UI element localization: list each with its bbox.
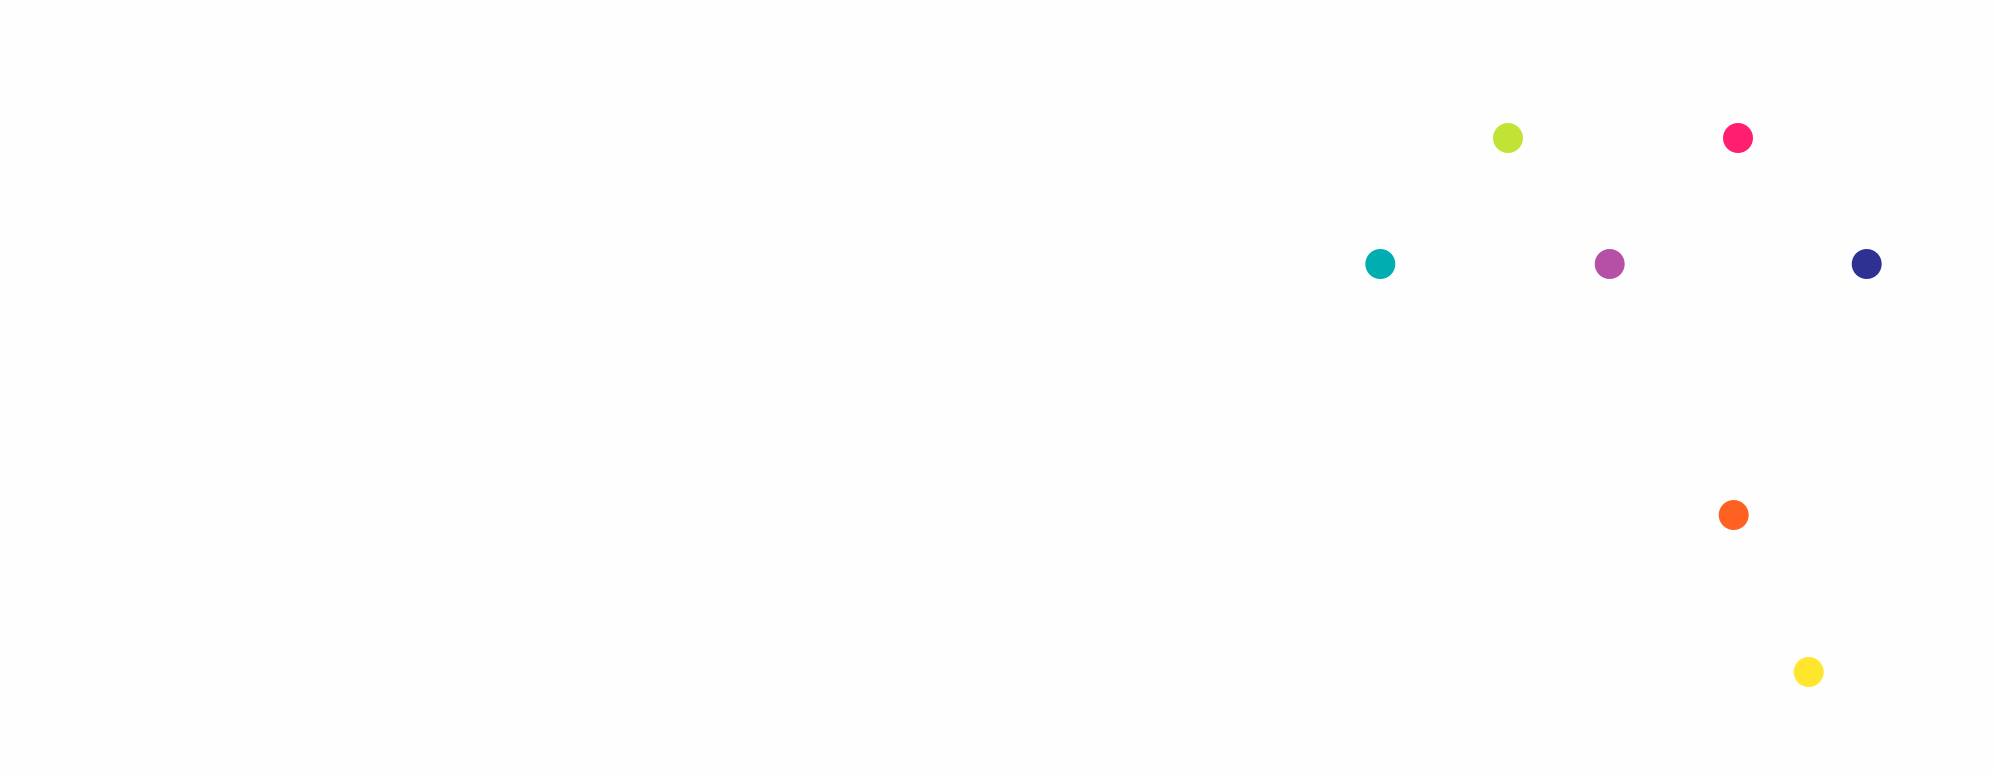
- icon: orange dot: [1719, 500, 1749, 530]
- icon: lime dot: [1493, 123, 1523, 153]
- icon: yellow dot: [1794, 657, 1824, 687]
- icon: pink dot: [1723, 123, 1753, 153]
- icon: purple dot: [1595, 249, 1625, 279]
- icon: teal dot: [1365, 249, 1395, 279]
- icon: navy dot: [1852, 249, 1882, 279]
